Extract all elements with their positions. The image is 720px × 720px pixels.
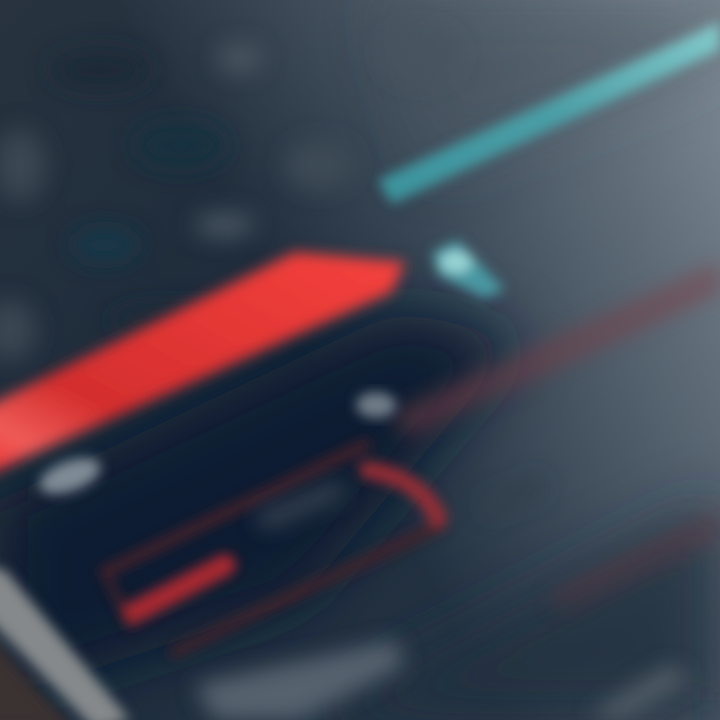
red outlined rounded shape <box>105 445 440 652</box>
red streak <box>0 252 405 478</box>
faint red streak lower right <box>550 510 720 610</box>
grey diagonal bar bottom left <box>0 565 130 720</box>
grey dashes lower centre <box>195 475 690 720</box>
grey dash beside faint red line <box>356 392 396 418</box>
faint red diagonal, right <box>390 262 720 436</box>
teal blob <box>432 240 505 298</box>
mottled texture top left <box>0 31 456 360</box>
pale smudge under red streak <box>35 451 105 501</box>
teal streak <box>378 22 720 204</box>
